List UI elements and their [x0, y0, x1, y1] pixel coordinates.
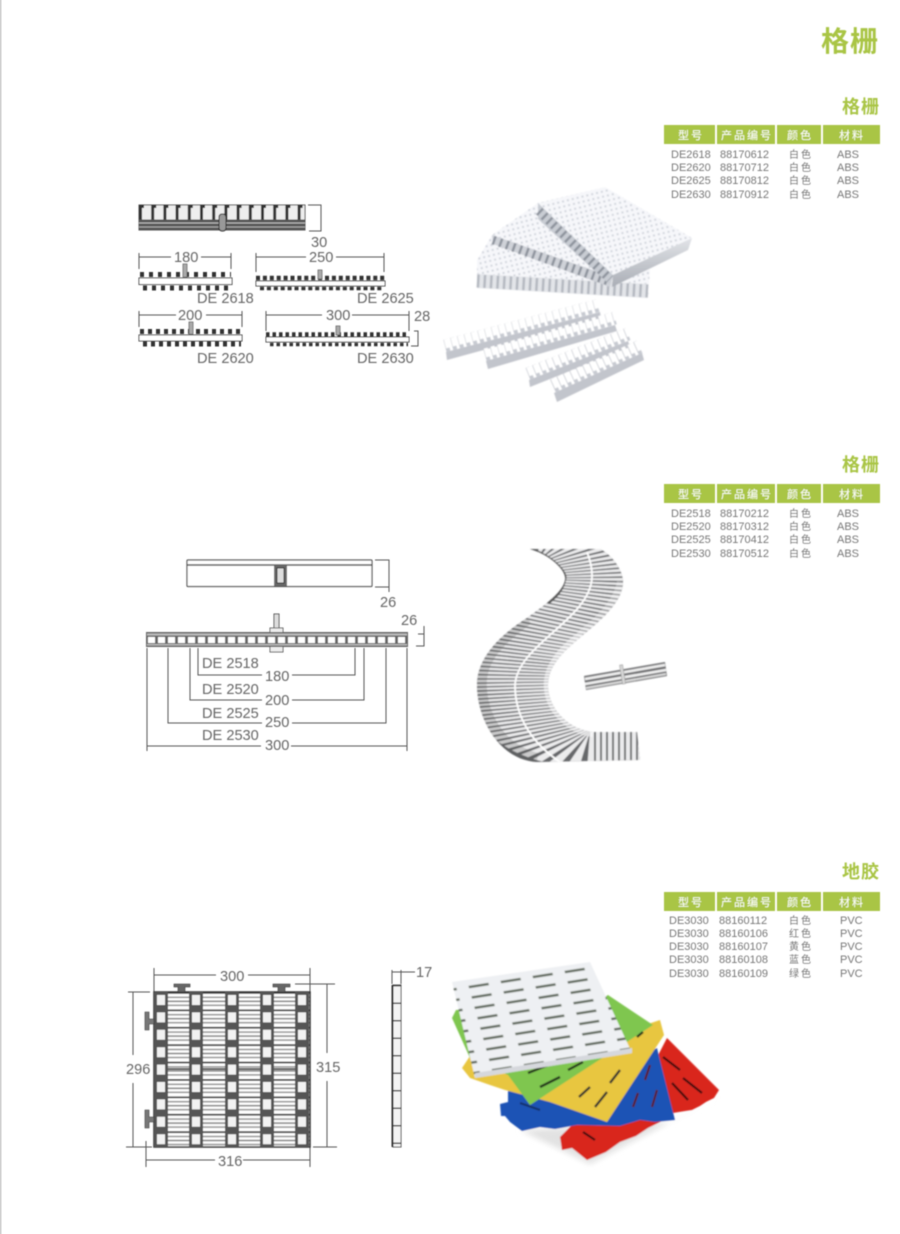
product photo: grating plates and strips	[445, 187, 692, 402]
plate: middle	[492, 203, 660, 287]
technical drawing: floor mat	[126, 965, 432, 1170]
table: grating 26xx: DE2625	[671, 175, 711, 187]
dimension set: 2530	[147, 648, 407, 754]
profile: DE 2620: 200	[178, 308, 202, 324]
bracket: 26 section	[416, 626, 424, 646]
table: floor mat: 88160107	[719, 941, 768, 953]
profile: DE 2618	[139, 250, 254, 307]
profile: DE 2625: 250	[309, 250, 333, 266]
table: grating 26xx: 88170812	[720, 175, 769, 187]
table: floor mat: PVC	[840, 928, 863, 940]
table: grating 25xx: 产品编号	[721, 487, 773, 501]
right dimension 315: 315	[316, 1060, 340, 1076]
strip 2	[485, 316, 617, 369]
table: grating 26xx: ABS	[837, 162, 859, 174]
table: grating 25xx: 白色	[789, 547, 813, 560]
mat: white	[452, 962, 632, 1078]
profile: DE 2630: DE 2630	[357, 351, 414, 367]
plate: bottom	[477, 235, 650, 298]
table: grating 26xx: 型号	[678, 128, 704, 142]
table: grating 26xx: DE2620	[671, 162, 711, 174]
dimension set: 2518: DE 2518	[202, 656, 259, 672]
page title: 格栅	[821, 26, 879, 57]
table: floor mat: 88160108	[719, 954, 768, 966]
table: floor mat: 红色	[789, 927, 813, 940]
table: grating 25xx: 白色	[789, 533, 813, 546]
heading: grating 25xx: 格栅	[842, 455, 880, 475]
bottom dimension 316	[146, 1141, 310, 1170]
dimension set: 2520: 200	[265, 693, 289, 709]
strip 3	[528, 332, 630, 387]
table: floor mat: DE3030	[669, 928, 709, 940]
product photo: coloured floor mats	[452, 962, 720, 1164]
mat plan	[145, 984, 310, 1147]
table: grating 26xx: 88170912	[720, 189, 769, 201]
panel: grating 25xx	[146, 455, 880, 765]
page edge line	[0, 0, 2, 1234]
technical drawing: grating 25xx	[146, 560, 424, 754]
dimension: 30: 30	[311, 235, 327, 251]
table: floor mat: DE3030	[669, 954, 709, 966]
dimension set: 2518: 180	[265, 669, 289, 685]
table: floor mat: DE3030	[669, 915, 709, 927]
strip 4	[553, 344, 644, 402]
table: floor mat: 产品编号	[721, 895, 773, 909]
table: floor mat: DE3030	[669, 941, 709, 953]
table: grating 26xx	[664, 125, 880, 201]
short grating piece	[584, 662, 667, 690]
mat: green	[452, 995, 653, 1105]
table: grating 26xx: ABS	[837, 175, 859, 187]
table: floor mat: DE3030	[669, 968, 709, 980]
panel: grating 26xx	[139, 97, 880, 402]
table: grating 25xx: DE2530	[671, 548, 711, 560]
table: grating 25xx: 白色	[789, 520, 813, 533]
table: grating 25xx: 88170312	[720, 521, 769, 533]
table: grating 25xx: ABS	[837, 534, 859, 546]
table: grating 26xx: 白色	[789, 148, 813, 161]
section bar with clip post	[146, 614, 408, 652]
table: grating 25xx: 88170212	[720, 508, 769, 520]
profile: DE 2630: 28	[414, 309, 430, 325]
table: grating 26xx: ABS	[837, 149, 859, 161]
table: grating 25xx: 颜色	[787, 487, 813, 501]
profile: DE 2630: 300	[326, 308, 350, 324]
table: floor mat: 88160106	[719, 928, 768, 940]
table: floor mat: 绿色	[789, 967, 813, 980]
strip 1	[445, 303, 601, 360]
curved grating ribs	[476, 548, 640, 763]
dimension: 26 side: 26	[380, 595, 396, 611]
table: grating 26xx: 产品编号	[721, 128, 773, 142]
table: grating 25xx: 88170412	[720, 534, 769, 546]
profile: DE 2620: DE 2620	[197, 351, 254, 367]
dimension set: 2525: 250	[265, 715, 289, 731]
mat: yellow	[462, 1020, 664, 1122]
right dimension 315	[295, 984, 340, 1147]
table: floor mat: 颜色	[787, 895, 813, 909]
table: floor mat: 白色	[789, 914, 813, 927]
mat: red	[560, 1038, 719, 1160]
table: floor mat: PVC	[840, 954, 863, 966]
technical drawing: grating 26xx profiles	[139, 205, 430, 367]
side view with dimension 17: 17	[416, 965, 432, 981]
dimension set: 2530: 300	[265, 738, 289, 754]
profile: DE 2618: 180	[174, 250, 198, 266]
soft shadow	[520, 1096, 720, 1164]
table: floor mat: 88160112	[719, 915, 767, 927]
heading: floor mat: 地胶	[842, 861, 880, 882]
top dimension 300	[154, 968, 310, 992]
table: floor mat: PVC	[840, 941, 863, 953]
top dimension 300: 300	[220, 969, 244, 985]
dimension set: 2525: DE 2525	[202, 706, 259, 722]
table: grating 25xx: DE2520	[671, 521, 711, 533]
profile: DE 2625: DE 2625	[357, 291, 414, 307]
dimension set: 2518	[198, 648, 355, 685]
table: grating 25xx: 材料	[839, 487, 865, 501]
table: grating 25xx: DE2525	[671, 534, 711, 546]
table: floor mat: 黄色	[789, 940, 813, 953]
dimension: 26 section: 26	[401, 613, 417, 629]
profile: DE 2625	[256, 250, 414, 307]
dimension set: 2530: DE 2530	[202, 728, 259, 744]
table: grating 26xx: 88170712	[720, 162, 769, 174]
table: grating 26xx: 白色	[789, 174, 813, 187]
heading: grating 26xx: 格栅	[842, 97, 880, 117]
left dimension 296: 296	[126, 1062, 150, 1078]
table: grating 25xx: 白色	[789, 507, 813, 520]
table: grating 26xx: 颜色	[787, 128, 813, 142]
bottom dimension 316: 316	[218, 1154, 242, 1170]
top view strip	[139, 205, 321, 231]
table: floor mat: PVC	[840, 915, 863, 927]
table: grating 26xx: DE2618	[671, 149, 711, 161]
table: grating 25xx: 型号	[678, 487, 704, 501]
dimension set: 2520	[190, 648, 364, 709]
table: grating 26xx: 白色	[789, 161, 813, 174]
table: floor mat: 88160109	[719, 968, 768, 980]
profile: DE 2618: DE 2618	[197, 291, 254, 307]
table: grating 25xx: 88170512	[720, 548, 769, 560]
table: grating 25xx: DE2518	[671, 508, 711, 520]
table: floor mat: 蓝色	[789, 953, 813, 966]
dimension set: 2525	[168, 648, 386, 731]
left dimension 296	[126, 992, 152, 1147]
profile: DE 2630	[266, 308, 430, 367]
table: floor mat: PVC	[840, 968, 863, 980]
profile: DE 2620	[139, 308, 254, 367]
panel: floor mat	[126, 861, 880, 1170]
table: grating 26xx: ABS	[837, 189, 859, 201]
table: grating 25xx: ABS	[837, 548, 859, 560]
table: floor mat: 型号	[678, 895, 704, 909]
dimension set: 2520: DE 2520	[202, 682, 259, 698]
table: floor mat: 材料	[839, 895, 865, 909]
product photo: curved grating	[470, 545, 667, 765]
table: floor mat	[664, 892, 880, 980]
table: grating 25xx	[664, 484, 880, 560]
plate: top	[538, 187, 692, 287]
table: grating 26xx: DE2630	[671, 189, 711, 201]
table: grating 26xx: 材料	[839, 128, 865, 142]
table: grating 26xx: 88170612	[720, 149, 769, 161]
table: grating 26xx: 白色	[789, 188, 813, 201]
table: grating 25xx: ABS	[837, 521, 859, 533]
side view with dimension 17	[392, 965, 432, 1147]
table: grating 25xx: ABS	[837, 508, 859, 520]
top view box	[187, 560, 389, 592]
mat: blue	[500, 1048, 675, 1131]
